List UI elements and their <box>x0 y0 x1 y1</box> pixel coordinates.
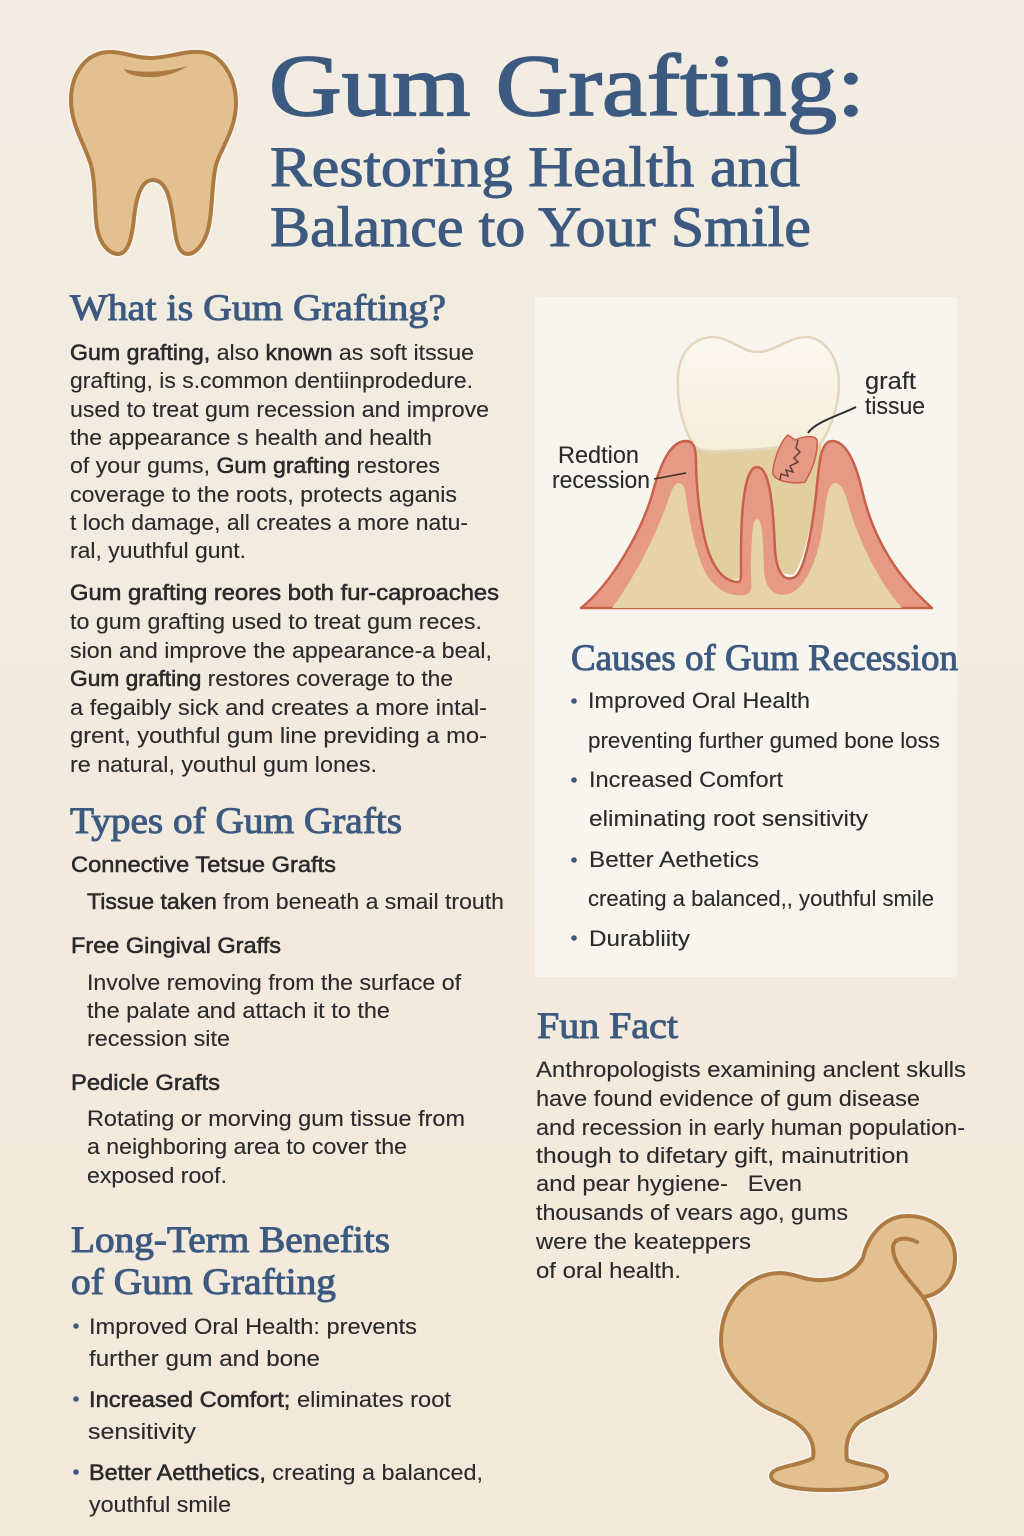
text block: fun fact <box>535 1057 966 1283</box>
causes list: Better Aethetics <box>589 847 759 872</box>
graft type: free gingival: recession site <box>87 1026 230 1051</box>
callout: graft tissue <box>808 368 925 433</box>
heading: long-term benefits <box>71 1220 390 1303</box>
text block: definition paragraph: Gum grafting, also known as soft itssue <box>70 340 474 365</box>
text block: second paragraph: Gum grafting restores coverage to the <box>70 666 453 691</box>
graft type: pedicle: Rotating or morving gum tissue from <box>87 1106 465 1131</box>
graft type: pedicle: a neighboring area to cover the <box>87 1134 407 1159</box>
text block: definition paragraph: grafting, is s.common dentiinprodedure. <box>70 368 473 393</box>
text block: definition paragraph: of your gums, Gum grafting restores <box>70 453 440 478</box>
text block: definition paragraph: used to treat gum recession and improve <box>70 397 489 422</box>
text block: fun fact: were the keateppers <box>535 1229 751 1254</box>
graft type: pedicle: exposed roof. <box>87 1163 227 1188</box>
text block: second paragraph <box>70 580 499 777</box>
panel: diagram and causes <box>535 297 958 977</box>
heading: types of gum grafts: Types of Gum Grafts <box>70 801 402 842</box>
panel: long-term benefits <box>71 1220 483 1517</box>
text block: definition paragraph <box>70 340 489 563</box>
heading: fun fact: Fun Fact <box>537 1006 679 1047</box>
heading: what is gum grafting: What is Gum Grafting? <box>70 288 446 329</box>
text block: definition paragraph: the appearance s health and health <box>70 425 432 450</box>
panel: what is gum grafting <box>70 288 499 777</box>
text block: second paragraph: grent, youthful gum line previding a mo- <box>70 723 487 748</box>
benefits list: Improved Oral Health: prevents <box>89 1314 417 1339</box>
text block: second paragraph: re natural, youthul gum lones. <box>70 752 377 777</box>
graft type: free gingival: Free Gingival Graffs <box>71 933 281 958</box>
causes list: Improved Oral Health <box>588 688 810 713</box>
causes list <box>571 688 940 951</box>
text block: second paragraph: to gum grafting used to treat gum reces. <box>70 609 482 634</box>
panel: fun fact <box>535 1006 966 1490</box>
text block: definition paragraph: ral, yuuthful gunt. <box>70 538 246 563</box>
text block: definition paragraph: t loch damage, all creates a more natu- <box>70 510 468 535</box>
text block: fun fact: Anthropologists examining anclent skulls <box>536 1057 966 1082</box>
graft type: connective tissue: Tissue taken from beneath a smail trouth <box>87 889 504 914</box>
text block: second paragraph: sion and improve the appearance-a beal, <box>70 638 492 663</box>
causes list: Durabliity <box>589 926 690 951</box>
benefits list: Increased Comfort; eliminates root <box>89 1387 451 1412</box>
callout: graft tissue: graft <box>865 368 916 395</box>
callout: graft tissue: tissue <box>865 393 925 420</box>
text block: definition paragraph: coverage to the roots, protects aganis <box>70 482 457 507</box>
causes list: eliminating root sensitivity <box>589 806 868 831</box>
graft type: free gingival <box>71 933 462 1051</box>
causes list: creating a balanced,, youthful smile <box>588 886 934 911</box>
title: Restoring Health and <box>270 136 800 199</box>
text block: fun fact: though to difetary gift, mainutrition <box>536 1143 909 1168</box>
text block: second paragraph: a fegaibly sick and creates a more intal- <box>70 695 487 720</box>
text block: second paragraph: Gum grafting reores both fur-caproaches <box>70 580 499 605</box>
icon: tooth <box>71 52 236 254</box>
graft type: pedicle: Pedicle Grafts <box>71 1070 220 1095</box>
text block: fun fact: and pear hygiene- Even <box>536 1171 802 1196</box>
heading: long-term benefits: Long-Term Benefits <box>71 1220 390 1261</box>
graft type: connective tissue: Connective Tetsue Grafts <box>71 852 336 877</box>
benefits list <box>73 1314 483 1517</box>
benefits list: sensitivity <box>88 1419 196 1444</box>
causes list: Increased Comfort <box>589 767 783 792</box>
text block: fun fact: thousands of vears ago, gums <box>536 1200 848 1225</box>
title: Balance to Your Smile <box>270 196 811 259</box>
heading: long-term benefits: of Gum Grafting <box>71 1262 336 1303</box>
graft type: connective tissue <box>71 852 504 914</box>
benefits list: Better Aetthetics, creating a balanced, <box>89 1460 483 1485</box>
text block: fun fact: and recession in early human population- <box>536 1115 965 1140</box>
heading: causes of gum recession: Causes of Gum Recession <box>571 638 958 679</box>
graft tissue patch <box>773 435 817 483</box>
graft type: free gingival: Involve removing from the surface of <box>87 970 462 995</box>
benefits list: youthful smile <box>89 1492 231 1517</box>
title: Gum Grafting: <box>269 38 865 135</box>
callout: recession: recession <box>552 467 650 494</box>
callout: recession <box>552 442 686 494</box>
graft type: free gingival: the palate and attach it to the <box>87 998 390 1023</box>
text block: fun fact: have found evidence of gum disease <box>536 1086 920 1111</box>
title <box>269 38 865 259</box>
callout: recession: Redtion <box>558 442 639 469</box>
panel: types of gum grafts <box>70 801 504 1188</box>
causes list: preventing further gumed bone loss <box>588 728 940 753</box>
text block: fun fact: of oral health. <box>536 1258 681 1283</box>
icon: ancient vessel <box>721 1216 955 1490</box>
diagram: tooth with gum graft <box>552 337 932 608</box>
benefits list: further gum and bone <box>89 1346 320 1371</box>
graft type: pedicle <box>71 1070 465 1188</box>
